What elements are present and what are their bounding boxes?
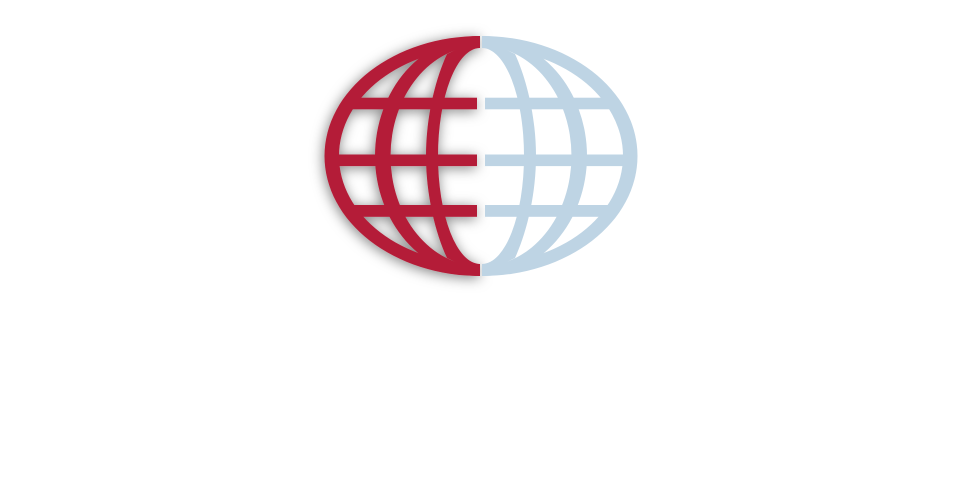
globe logo: [314, 29, 638, 287]
right hemisphere in light blue: [482, 36, 642, 276]
left hemisphere in red with shadow: [320, 36, 480, 276]
